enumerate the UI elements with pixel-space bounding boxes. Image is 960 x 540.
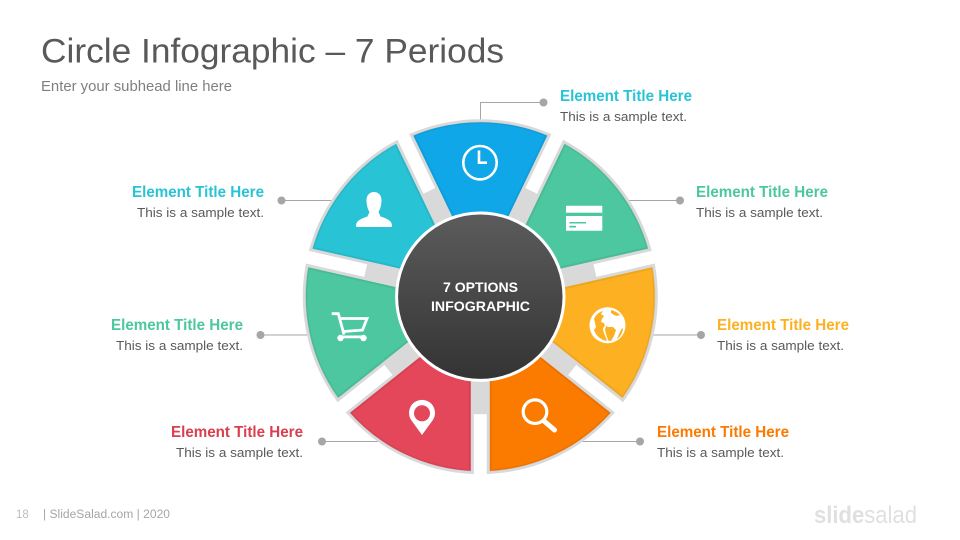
footer page number: 18 bbox=[16, 509, 29, 521]
segment: top blue with clock bbox=[411, 121, 549, 221]
label: lower left: This is a sample text. bbox=[176, 445, 303, 460]
label: lower left: Element Title Here bbox=[171, 424, 303, 441]
label: right: Element Title Here bbox=[717, 317, 849, 334]
label: top bbox=[560, 88, 692, 124]
subhead: Enter your subhead line here bbox=[41, 79, 232, 95]
label: upper right: This is a sample text. bbox=[696, 205, 823, 220]
label: upper left: This is a sample text. bbox=[137, 205, 264, 220]
label: upper right: Element Title Here bbox=[696, 184, 828, 201]
center label: INFOGRAPHIC bbox=[431, 298, 530, 314]
icon: credit card bbox=[566, 206, 602, 231]
icon: magnifier bbox=[523, 400, 554, 430]
center label: 7 OPTIONS bbox=[443, 279, 518, 295]
label: right bbox=[717, 317, 849, 353]
icon: map pin bbox=[409, 400, 435, 435]
logo: slidesalad wordmark: slidesalad bbox=[814, 502, 917, 529]
title: Circle Infographic – 7 Periods bbox=[41, 32, 504, 70]
leader lines bbox=[256, 98, 705, 446]
icon: shopping cart bbox=[332, 314, 367, 341]
segment: left green with cart bbox=[293, 246, 422, 403]
footer credit: | SlideSalad.com | 2020 bbox=[43, 509, 170, 521]
label: lower left bbox=[171, 424, 303, 460]
label: right: This is a sample text. bbox=[717, 338, 844, 353]
label: lower right: This is a sample text. bbox=[657, 445, 784, 460]
segment: upper left teal with person bbox=[300, 133, 464, 304]
icon: globe bbox=[590, 307, 626, 343]
label: upper left: Element Title Here bbox=[132, 184, 264, 201]
icon: clock bbox=[463, 146, 497, 179]
segment: lower left red with pin bbox=[342, 335, 510, 485]
label: top: Element Title Here bbox=[560, 88, 692, 105]
label: lower right bbox=[657, 424, 789, 460]
label: left: Element Title Here bbox=[111, 317, 243, 334]
icon: person bbox=[356, 192, 392, 227]
label: left: This is a sample text. bbox=[116, 338, 243, 353]
center label bbox=[431, 279, 530, 314]
label: left bbox=[111, 317, 243, 353]
segment: upper right green with card bbox=[496, 133, 661, 304]
grey spokes between segments bbox=[364, 187, 597, 414]
center circle bbox=[397, 213, 564, 380]
label: top: This is a sample text. bbox=[560, 109, 687, 124]
segment: lower right orange with magnifier bbox=[451, 335, 619, 485]
segment: right yellow with globe bbox=[539, 246, 667, 403]
label: upper right bbox=[696, 184, 828, 220]
label: lower right: Element Title Here bbox=[657, 424, 789, 441]
label: upper left bbox=[132, 184, 264, 220]
